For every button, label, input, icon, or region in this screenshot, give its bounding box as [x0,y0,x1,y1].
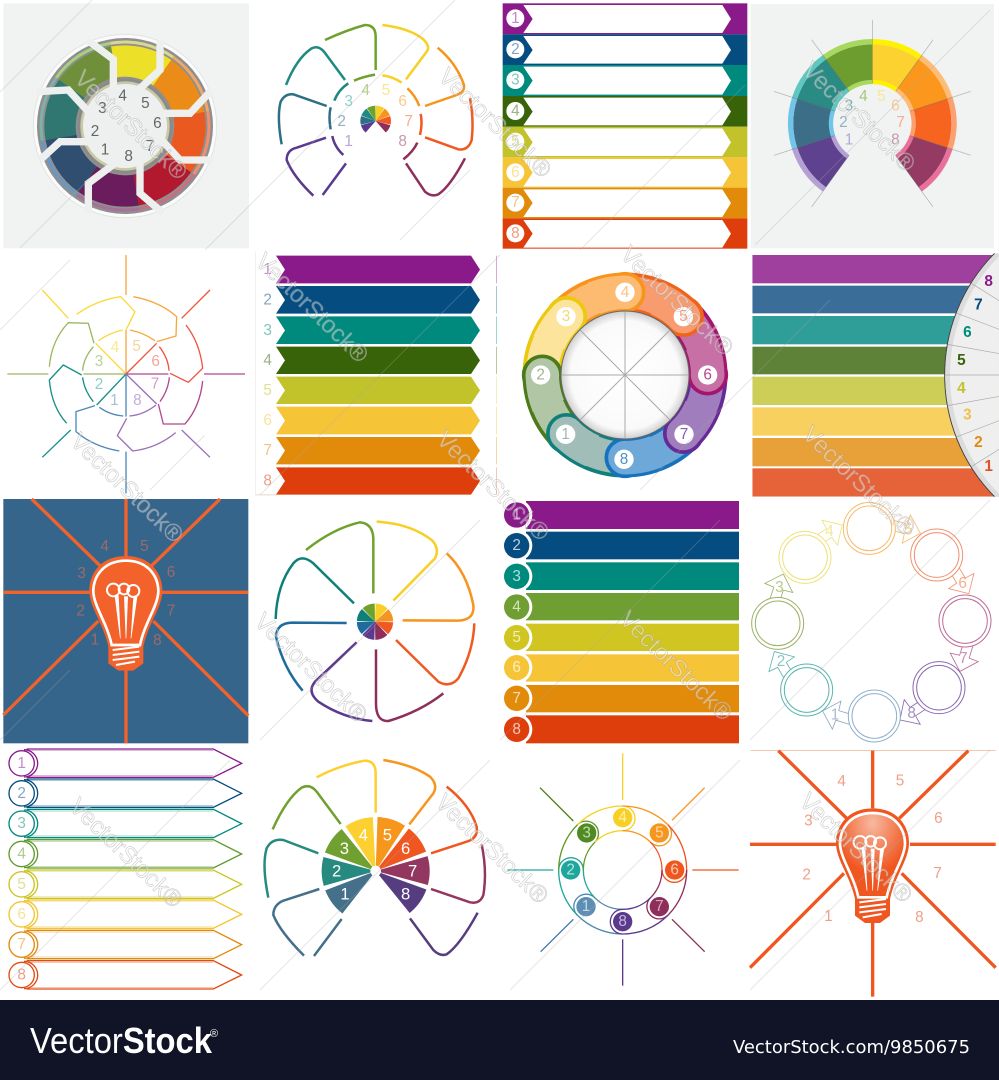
panel: eight bars with white arrow labels: 1 [511,10,520,27]
panel: white square with orange light bulb and rays: 3 [804,812,813,829]
panel: open fan with large numbered wedges: 5 [383,825,392,844]
panel: flat bars with numbered circles: 1 [512,506,521,523]
panel: open fan with large numbered wedges: 6 [401,839,410,858]
panel: white square with orange light bulb and rays [750,750,996,997]
panel: ring of circles joined by arrows: 2 [777,653,785,670]
panel: segmented ring with white zigzag separators: 5 [141,95,150,112]
panel: outlined arrows with double-ring numbers: 5 [17,876,26,893]
panel: bars ending on a numbered dial: 2 [974,434,983,451]
panel: interlocking ring with rounded heads and white centre: 4 [621,284,630,301]
panel: thin outline spiral with rays: 6 [151,353,160,370]
panel: outlined arrows with double-ring numbers [9,749,242,989]
panel: bars ending on a numbered dial: 7 [974,296,983,313]
watermark repeats: VectorStock® [433,63,557,184]
panel: interlocking ring with rounded heads and white centre: 3 [562,308,570,325]
panel: eight arrow bars with outside numbers: 8 [263,472,272,489]
panel: bars ending on a numbered dial: 8 [984,273,993,290]
panel: thin outline spiral with rays: 3 [95,353,103,370]
footer registered mark: ® [210,1028,218,1040]
panel: interlocking ring with rounded heads and white centre: 6 [703,366,712,383]
panel: bars ending on a numbered dial: 1 [984,458,993,475]
panel: thin outline spiral with rays: 4 [111,339,120,356]
panel: bars ending on a numbered dial: 4 [957,380,966,397]
panel: thin ring with filled number dots and rays: 1 [582,898,590,915]
panel: interlocking ring with rounded heads and white centre [424,174,826,576]
panel: three-quarter ring on grey with shadows [751,4,994,248]
panel: eight arrow bars with outside numbers: 2 [263,291,272,308]
panel: thin outline spiral with rays: 8 [133,392,142,409]
panel: blue square with light bulb and rays: 1 [91,631,99,648]
panel: open fan with large numbered wedges: 8 [401,884,410,903]
panel: white square with orange light bulb and rays: 8 [915,909,924,926]
panel: flat bars with numbered circles [501,499,739,745]
panel: thin ring with filled number dots and rays: 4 [618,809,627,826]
panel: outlined arrows with double-ring numbers: 8 [17,966,26,983]
panel: open fan with large numbered wedges: 7 [408,861,417,880]
panel: bars ending on a numbered dial: 3 [963,406,972,423]
watermark repeats: VectorStock® [794,788,918,909]
panel: thin ring with filled number dots and rays: 3 [582,824,591,841]
panel: eight bars with white arrow labels: 3 [511,71,520,88]
panel: flat bars with numbered circles: 3 [512,568,521,585]
panel: ring of circles joined by arrows: 5 [904,521,913,538]
panel: flat bars with numbered circles: 5 [512,629,521,646]
watermark repeats: VectorStock® [64,793,188,914]
panel: blue square with light bulb and rays [3,499,248,743]
panel: outlined arrows with double-ring numbers: 1 [17,755,26,772]
panel: segmented ring with white zigzag separators [3,3,249,248]
panel: outlined arrows with double-ring numbers: 4 [17,845,26,862]
watermark repeats [64,57,921,914]
panel: thin outline spiral with rays [7,255,245,493]
panel: open fan with large numbered wedges: 2 [332,861,341,880]
panel: white square with orange light bulb and rays: 4 [837,773,846,790]
panel: thin ring with filled number dots and rays: 2 [566,861,575,878]
panel: open fan outline with mini wheel [279,25,473,196]
panel: ring of circles joined by arrows: 3 [775,579,784,596]
panel: segmented ring with white zigzag separators: 1 [101,141,109,158]
panel: flat bars with numbered circles: 7 [512,690,521,707]
watermark repeats: VectorStock® [797,57,921,178]
panel: thin outline spiral with rays: 1 [110,392,119,409]
panel: three-quarter ring on grey with shadows: 2 [839,114,848,131]
panel: blue square with light bulb and rays: 8 [153,632,162,649]
panel: interlocking ring with rounded heads and white centre: 2 [536,366,545,383]
watermark repeats: VectorStock® [430,789,554,910]
panel: thin outline spiral with rays: 2 [95,376,103,393]
panel: ring of circles joined by arrows: 7 [959,650,968,667]
panel: open fan outline with mini wheel: 5 [382,82,390,99]
panel: segmented ring with white zigzag separators: 2 [91,123,99,140]
panel: interlocking ring with rounded heads and white centre: 1 [561,426,570,443]
panel: white square with orange light bulb and rays: 2 [802,866,811,883]
panel: thin ring with filled number dots and rays: 7 [655,898,664,915]
panel: blue square with light bulb and rays: 2 [76,602,85,619]
panel: blue square with light bulb and rays: 6 [167,564,175,581]
panel: blue square with light bulb and rays: 5 [140,538,149,555]
watermark repeats: VectorStock® [615,241,739,362]
panel: segmented ring with white zigzag separators: 8 [124,148,133,165]
panel: three-quarter ring on grey with shadows: 8 [891,131,900,148]
panel: ring of circles joined by arrows: 1 [831,706,839,723]
panel: open fan outline with mini wheel: 1 [344,133,353,150]
panel: eight arrow bars with outside numbers: 1 [263,261,272,278]
panel: flat bars with numbered circles: 6 [512,659,521,676]
panel: eight arrow bars with outside numbers: 5 [263,382,272,399]
panel: bars ending on a numbered dial: 5 [957,352,966,369]
panel: open fan outline with mini wheel: 8 [398,133,407,150]
panel: eight arrow bars with outside numbers: 6 [263,412,272,429]
panel: outlined arrows with double-ring numbers: 2 [17,785,26,802]
footer bar [0,1000,999,1080]
panel: flat bars with numbered circles: 2 [512,537,521,554]
panel: open fan outline with mini wheel: 4 [361,82,370,99]
panel: ring of circles joined by arrows: 4 [825,523,834,540]
panel: segmented ring with white zigzag separators: 7 [146,138,154,155]
panel: open fan outline with mini wheel: 6 [398,93,407,110]
panel: blue square with light bulb and rays: 7 [167,602,175,619]
panel: white square with orange light bulb and rays: 5 [896,772,904,789]
panel: eight bars with white arrow labels: 5 [511,133,520,150]
panel: eight bars with white arrow labels: 4 [511,102,520,119]
panel: interlocking ring with rounded heads and white centre: 7 [680,426,688,443]
panel: open fan with large numbered wedges: 4 [359,825,368,844]
panel: interlocking ring with rounded heads and white centre: 8 [620,451,628,468]
watermark repeats: VectorStock® [250,248,374,369]
panel: thin ring with filled number dots and rays: 6 [670,861,679,878]
panel: open fan with large numbered wedges [265,760,485,956]
panel: blue square with light bulb and rays: 4 [100,538,109,555]
panel: three-quarter ring on grey with shadows: 1 [845,131,853,148]
panel: open fan with large numbered wedges: 1 [340,884,350,903]
panel: white square with orange light bulb and rays: 1 [824,908,833,925]
watermark repeats: VectorStock® [431,426,555,547]
panel: bars ending on a numbered dial [752,253,999,497]
panel: eight arrow bars with outside numbers [255,252,497,495]
panel: segmented ring with white zigzag separators: 3 [98,100,107,117]
panel: interlocking ring with rounded heads and white centre: 5 [679,308,688,325]
panel: thin ring with filled number dots and rays [495,742,751,998]
panel: bars ending on a numbered dial: 6 [963,324,972,341]
panel: three-quarter ring on grey with shadows: 6 [891,97,900,114]
panel: three-quarter ring on grey with shadows: 4 [859,88,868,105]
watermark repeats: VectorStock® [797,421,921,542]
panel: full fan outline with central wheel [276,522,474,721]
panel: eight bars with white arrow labels: 8 [511,225,520,242]
panel: ring of circles joined by arrows: 8 [907,705,916,722]
watermark repeats: VectorStock® [614,606,738,727]
panel: outlined arrows with double-ring numbers: 3 [17,815,26,832]
panel: eight arrow bars with outside numbers: 4 [263,352,272,369]
panel: outlined arrows with double-ring numbers: 6 [17,906,26,923]
footer logo: VectorStock [30,1020,213,1061]
watermark repeats: VectorStock® [65,428,189,549]
panel: three-quarter ring on grey with shadows: 3 [845,97,853,114]
panel: open fan outline with mini wheel: 7 [404,113,413,130]
panel: white square with orange light bulb and rays: 7 [933,865,942,882]
panel: thin outline spiral with rays: 5 [132,338,141,355]
panel: outlined arrows with double-ring numbers: 7 [17,936,26,953]
panel: ring of circles joined by arrows: 6 [958,575,967,592]
footer image id: VectorStock.com/9850675 [733,1037,970,1058]
panel: open fan with large numbered wedges: 3 [340,839,349,858]
panel: open fan outline with mini wheel: 2 [337,113,346,130]
watermark repeats: VectorStock® [249,608,373,729]
panel: open fan outline with mini wheel: 3 [344,93,353,110]
panel: eight bars with white arrow labels [503,3,747,249]
panel: thin ring with filled number dots and rays: 8 [618,913,627,930]
panel: white square with orange light bulb and rays: 6 [934,810,943,827]
panel: eight bars with white arrow labels: 7 [511,194,520,211]
panel: three-quarter ring on grey with shadows: 7 [896,114,905,131]
panel: eight arrow bars with outside numbers: 3 [263,322,272,339]
panel: flat bars with numbered circles: 4 [512,598,521,615]
panel: flat bars with numbered circles: 8 [512,721,521,738]
panel: three-quarter ring on grey with shadows: 5 [877,88,886,105]
panel: eight bars with white arrow labels: 2 [511,41,520,58]
panel: ring of circles joined by arrows [752,502,991,742]
panel: segmented ring with white zigzag separators: 4 [118,87,127,104]
panel: segmented ring with white zigzag separators: 6 [153,115,162,132]
panel: eight arrow bars with outside numbers: 7 [263,442,272,459]
panel: thin outline spiral with rays: 7 [151,375,159,392]
watermark repeats: VectorStock® [69,65,193,186]
panel: thin ring with filled number dots and rays: 5 [655,824,664,841]
panel: eight bars with white arrow labels: 6 [511,164,520,181]
panel: blue square with light bulb and rays: 3 [77,565,86,582]
